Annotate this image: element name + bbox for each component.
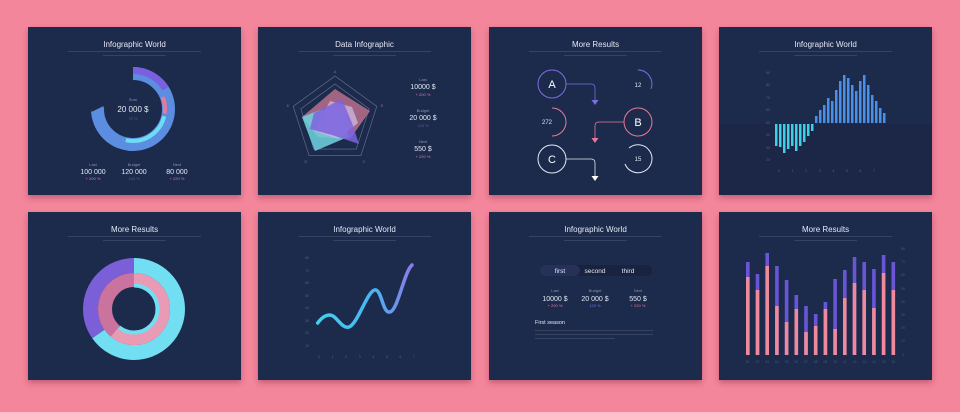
y axis labels: 70 (766, 96, 770, 100)
tabs (540, 265, 652, 276)
x axis labels (746, 360, 895, 364)
right axis labels: 80 (901, 247, 905, 251)
stats row: 120 % (128, 176, 140, 181)
stacked bars (746, 253, 895, 355)
y axis labels: 80 (766, 83, 770, 87)
x axis labels: 3 (819, 169, 821, 173)
y axis labels: 40 (766, 133, 770, 137)
radar chart: C (363, 159, 366, 164)
stats row: Last (89, 162, 98, 167)
x axis labels: 5 (386, 355, 388, 359)
panel: donut sum (28, 27, 241, 195)
center label: 72 % (128, 116, 138, 121)
title: Infographic World (794, 40, 857, 49)
title: Data Infographic (335, 40, 394, 49)
stats row (542, 288, 647, 308)
title: More Results (802, 225, 849, 234)
x axis labels: 16 (891, 360, 895, 364)
panel: flow circles (489, 27, 702, 195)
stats column: Next (419, 139, 428, 144)
value 12 (635, 70, 652, 89)
stats row: + 200 % (548, 303, 563, 308)
stats row: 80 000 (166, 169, 188, 176)
stats row: 20 000 $ (581, 296, 609, 303)
stats row: 100 000 (80, 169, 106, 176)
stats column (409, 77, 437, 159)
tabs: third (622, 268, 635, 275)
y axis labels: 60 (305, 281, 309, 285)
x axis labels: 1 (792, 169, 794, 173)
x axis labels: 05 (785, 360, 789, 364)
value 15 (625, 145, 652, 173)
x axis labels: 2 (345, 355, 347, 359)
node A with arrow (538, 70, 598, 105)
x axis labels: 1 (332, 355, 334, 359)
y axis labels: 50 (305, 294, 309, 298)
panel: bar chart pos/neg (719, 27, 932, 195)
radar chart: D (305, 159, 308, 164)
y axis labels: 70 (305, 269, 309, 273)
y axis labels: 30 (305, 319, 309, 323)
tabs: second (585, 268, 606, 275)
radar chart: E (287, 103, 290, 108)
x axis labels: 03 (765, 360, 769, 364)
y axis labels: 10 (305, 344, 309, 348)
x axis labels: 06 (794, 360, 798, 364)
stats column: 10000 $ (410, 84, 436, 91)
stats row: Last (551, 288, 560, 293)
value 15: 15 (635, 157, 642, 163)
node C with arrow: C (548, 154, 556, 166)
stats column: Budget (417, 108, 430, 113)
stats column: Last (419, 77, 428, 82)
x axis labels: 08 (814, 360, 818, 364)
stats column: + 220 % (416, 154, 431, 159)
stats row: + 220 % (170, 176, 185, 181)
x axis labels (318, 355, 415, 359)
line curve (318, 265, 412, 327)
x axis labels: 7 (873, 169, 875, 173)
value 272: 272 (542, 120, 553, 126)
x axis labels: 2 (805, 169, 807, 173)
right axis labels: 60 (901, 273, 905, 277)
center label: 20 000 $ (117, 105, 149, 114)
right axis labels: 10 (901, 339, 905, 343)
title: More Results (111, 225, 158, 234)
stats row: + 220 % (631, 303, 646, 308)
x axis labels: 4 (372, 355, 374, 359)
x axis labels: 13 (862, 360, 866, 364)
stats row: + 200 % (86, 176, 101, 181)
y axis labels: 90 (766, 71, 770, 75)
x axis labels: 6 (859, 169, 861, 173)
value 272 (542, 108, 566, 136)
stats row: 120 000 (121, 169, 147, 176)
y axis labels: 20 (305, 331, 309, 335)
stats row (80, 162, 188, 181)
right axis labels: 20 (901, 326, 905, 330)
bars (775, 124, 814, 153)
x axis labels: 11 (843, 360, 847, 364)
stats row: Budget (589, 288, 602, 293)
stats column: 550 $ (414, 146, 432, 153)
first season text (535, 320, 653, 339)
title: Infographic World (564, 225, 627, 234)
radar chart (287, 69, 384, 164)
first season text: First season (535, 320, 565, 326)
right axis labels: 40 (901, 300, 905, 304)
node A with arrow: A (548, 79, 556, 91)
center label (117, 97, 149, 121)
value 12: 12 (635, 83, 642, 89)
title: Infographic World (103, 40, 166, 49)
x axis labels: 09 (823, 360, 827, 364)
right axis labels: 70 (901, 260, 905, 264)
stats row: 120 % (589, 303, 601, 308)
y axis labels: 20 (766, 158, 770, 162)
stats column: 120 % (417, 123, 429, 128)
center label: Sum (129, 97, 138, 102)
x axis labels: 14 (872, 360, 876, 364)
title: Infographic World (333, 225, 396, 234)
stats column: 20 000 $ (409, 115, 437, 122)
x axis labels: 6 (399, 355, 401, 359)
radar chart: B (381, 103, 384, 108)
right axis labels: 50 (901, 287, 905, 291)
x axis labels: 10 (833, 360, 837, 364)
stats column: + 200 % (416, 92, 431, 97)
stats row: Next (634, 288, 643, 293)
stats row: Next (173, 162, 182, 167)
x axis labels: 3 (359, 355, 361, 359)
tabs: first (555, 268, 565, 275)
x axis labels: 5 (846, 169, 848, 173)
title: More Results (572, 40, 619, 49)
panel: double donut (28, 212, 241, 380)
radar chart: A (334, 69, 337, 74)
right axis labels (901, 247, 905, 357)
x axis labels: 15 (882, 360, 886, 364)
stats row: Budget (128, 162, 141, 167)
x axis labels: 02 (756, 360, 759, 364)
y axis labels: 80 (305, 256, 309, 260)
x axis labels: 7 (413, 355, 415, 359)
x axis labels: 07 (804, 360, 808, 364)
panel: radar (258, 27, 471, 195)
y axis labels (305, 256, 309, 348)
y axis labels: 50 (766, 121, 770, 125)
donut chart (90, 266, 178, 352)
panel: stacked bars (719, 212, 932, 380)
x axis labels: 12 (853, 360, 856, 364)
donut chart (94, 70, 172, 148)
y axis labels (766, 71, 770, 162)
node B with arrow (592, 108, 652, 143)
node C with arrow (538, 145, 598, 181)
y axis labels: 60 (766, 108, 770, 112)
x axis labels: 01 (746, 360, 750, 364)
x axis labels: 0 (778, 169, 780, 173)
node B with arrow: B (634, 117, 642, 129)
right axis labels: 30 (901, 313, 905, 317)
panel: line chart (258, 212, 471, 380)
right axis labels: 0 (902, 353, 904, 357)
stats row: 550 $ (629, 296, 647, 303)
panel: tabs stats (489, 212, 702, 380)
x axis labels: 0 (318, 355, 320, 359)
y axis labels: 30 (766, 146, 770, 150)
x axis labels: 04 (775, 360, 779, 364)
y axis labels: 40 (305, 306, 309, 310)
x axis labels: 4 (832, 169, 834, 173)
x axis labels (778, 169, 875, 173)
stats row: 10000 $ (542, 296, 568, 303)
